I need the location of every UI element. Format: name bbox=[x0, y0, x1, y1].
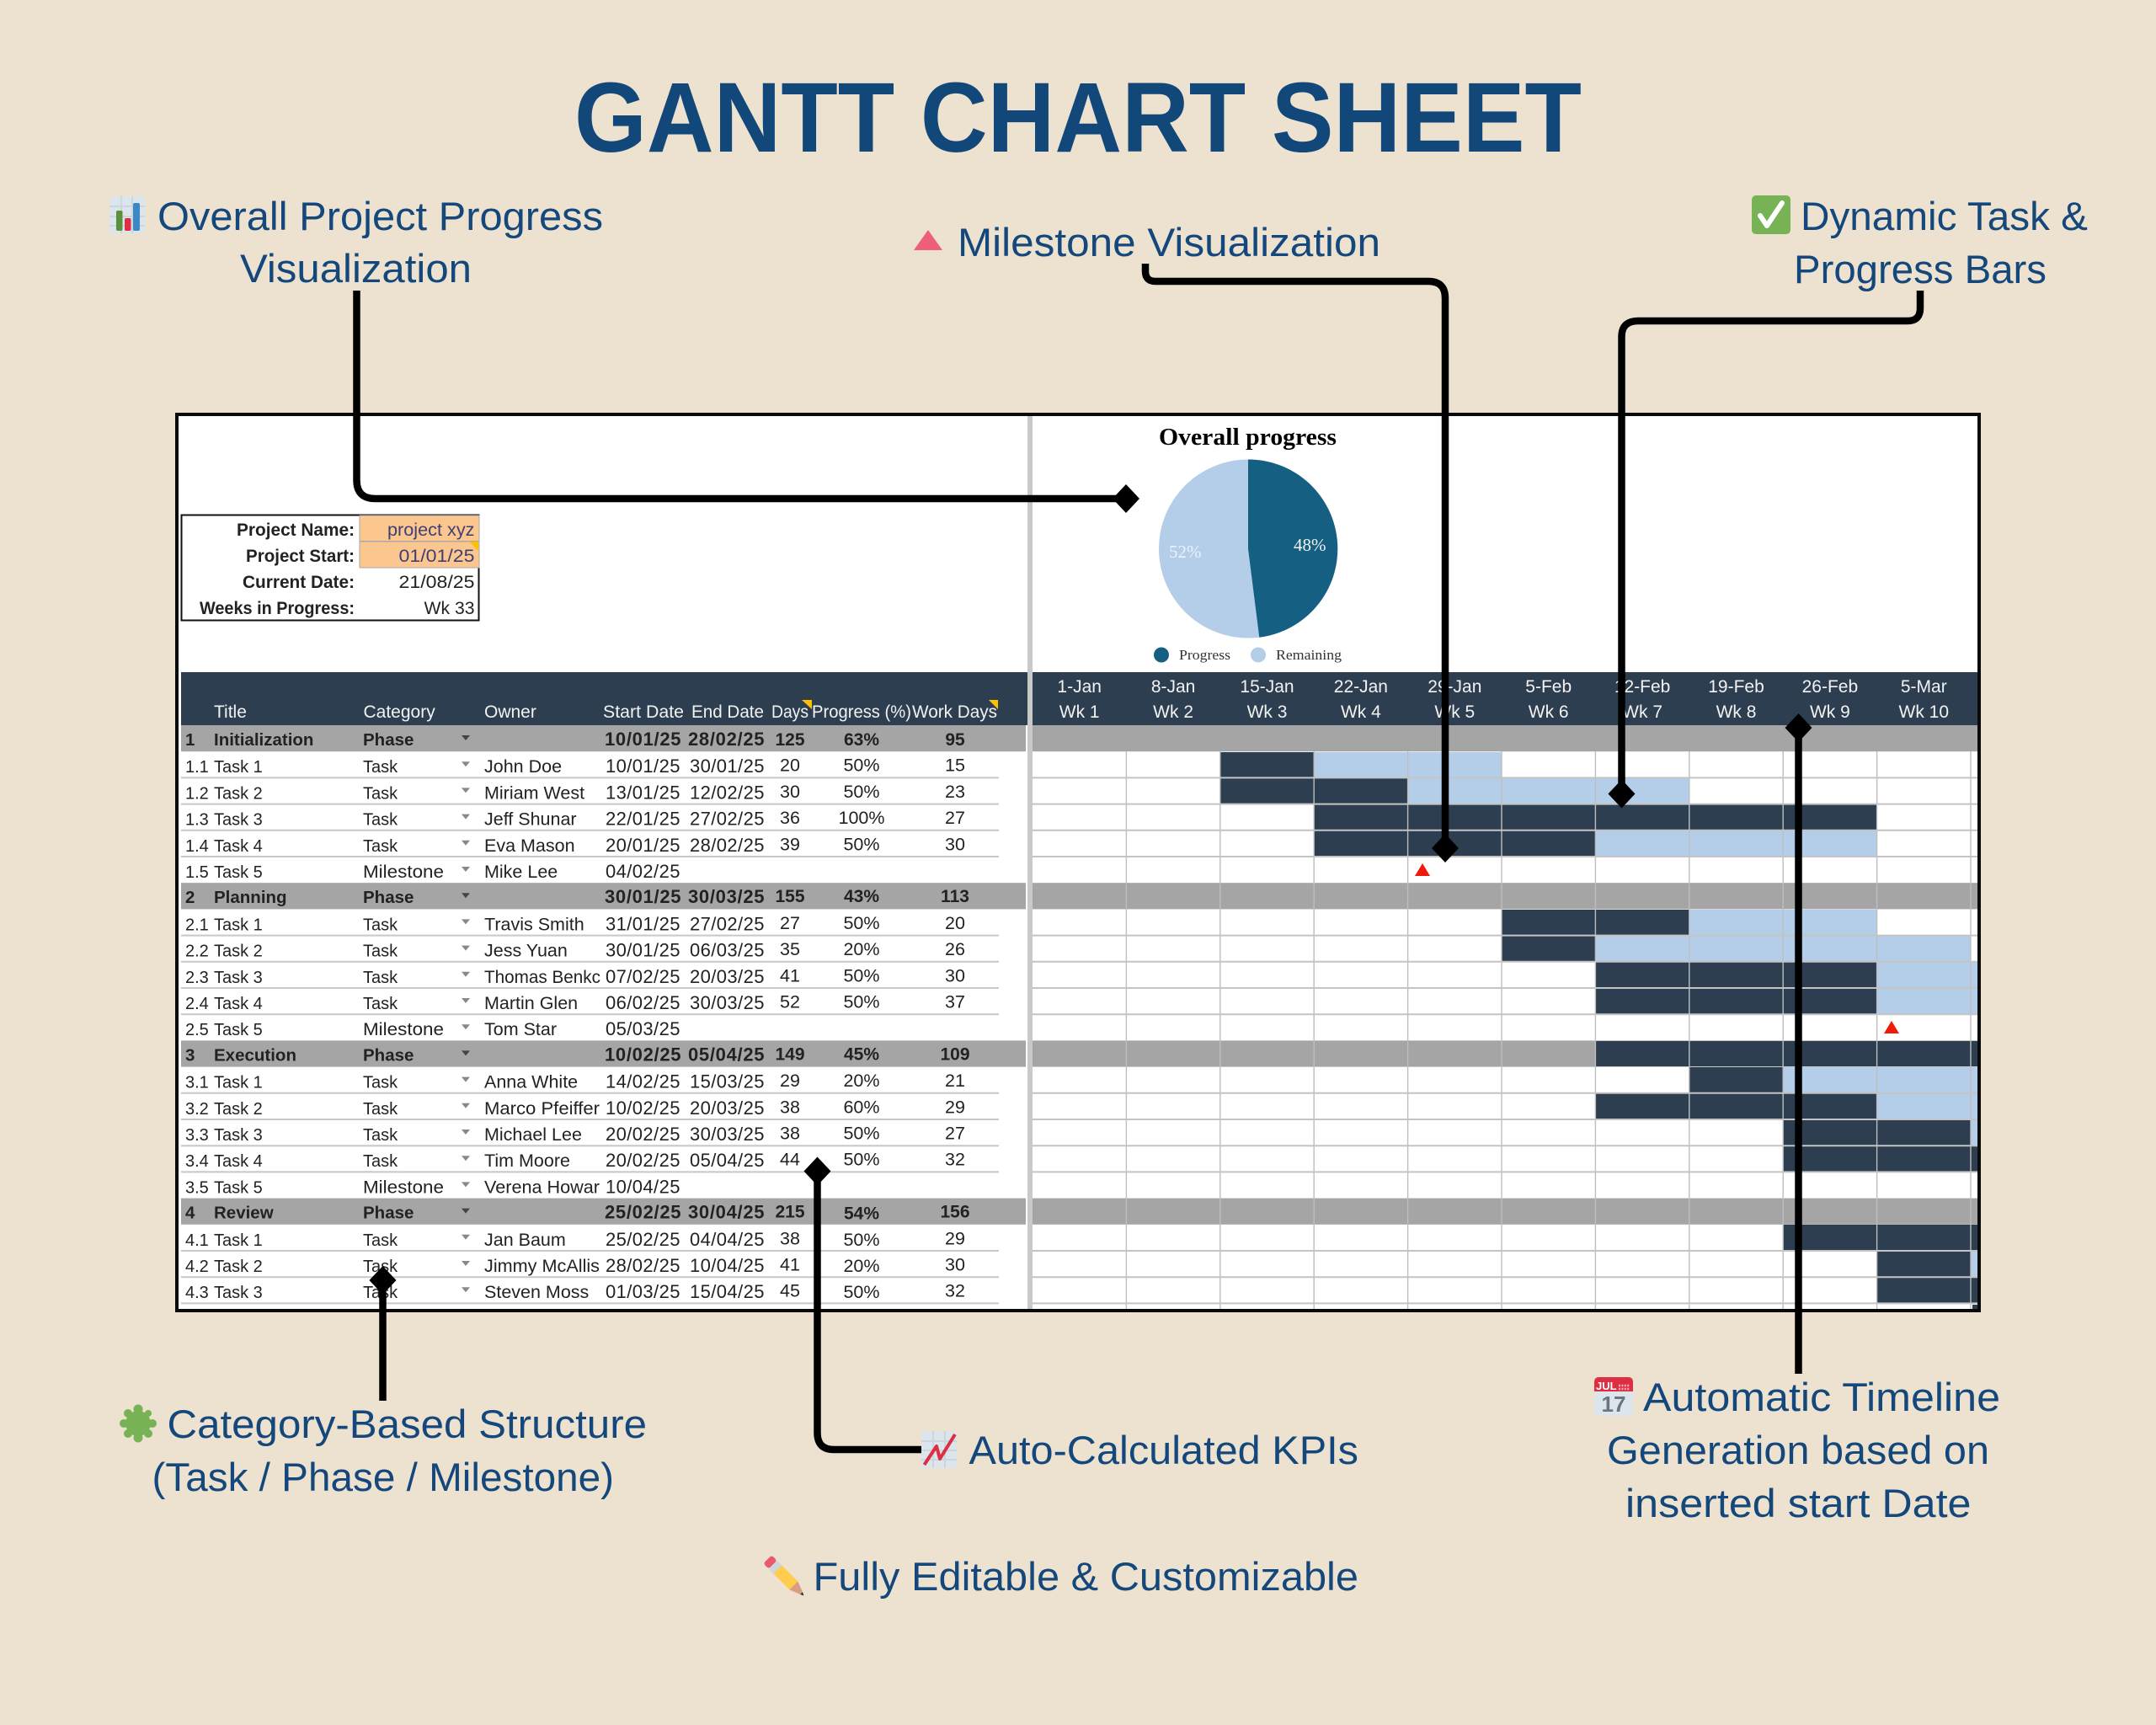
panel: gantt sheet bbox=[177, 414, 1979, 1311]
row 2.1: 27/02/25 bbox=[690, 913, 765, 934]
row 3.3: 3.3 bbox=[185, 1126, 209, 1145]
table header band: 26-Feb bbox=[1802, 677, 1858, 697]
row 4.2: 41 bbox=[780, 1255, 800, 1275]
phase row 2: Phase bbox=[363, 888, 414, 907]
table header band: Wk 2 bbox=[1153, 702, 1193, 722]
row 3.1: 21 bbox=[945, 1071, 965, 1091]
row 3.2: Task bbox=[363, 1100, 398, 1119]
phase row 3 bbox=[185, 1044, 970, 1065]
row 3.5: 10/04/25 bbox=[606, 1176, 680, 1197]
icon: milestone marker 1.5 bbox=[1415, 863, 1430, 876]
chart: overall progress pie: 48% bbox=[1294, 535, 1326, 555]
row 3.1: Task 1 bbox=[214, 1074, 263, 1092]
row 1.5: Task 5 bbox=[214, 863, 263, 882]
callout: category-based structure: (Task / Phase / Milestone) bbox=[152, 1455, 614, 1499]
row 2.1: 20 bbox=[945, 913, 965, 933]
row 3.3: Task bbox=[363, 1126, 398, 1145]
table header band: 12-Feb bbox=[1614, 677, 1670, 697]
row 3.3: 20/02/25 bbox=[606, 1124, 680, 1145]
row 4.3: Steven Moss bbox=[484, 1282, 589, 1302]
row 2.4: 50% bbox=[843, 992, 880, 1012]
row 2.3: 50% bbox=[843, 965, 880, 985]
row 3.3: 50% bbox=[843, 1124, 880, 1144]
phase row 2: 113 bbox=[941, 887, 969, 906]
row 2.2: 26 bbox=[945, 939, 965, 959]
row 2.1: 50% bbox=[843, 913, 880, 933]
row 4.2: Jimmy McAllis bbox=[484, 1256, 600, 1276]
row 1.4: 39 bbox=[780, 834, 800, 854]
row 2.1: Travis Smith bbox=[484, 914, 584, 934]
row 1.1: 10/01/25 bbox=[606, 756, 680, 777]
phase row 4: Review bbox=[214, 1204, 274, 1223]
row 2.4: 06/02/25 bbox=[606, 992, 680, 1013]
icon: calendar bbox=[1594, 1377, 1633, 1417]
row 2.5: Milestone bbox=[363, 1019, 444, 1039]
row 2.4: 2.4 bbox=[185, 995, 209, 1013]
row 2.3: Thomas Benkc bbox=[484, 967, 600, 987]
row 2.2: Task bbox=[363, 943, 398, 961]
row 1.4: 20/01/25 bbox=[606, 835, 680, 856]
phase row 2: Planning bbox=[214, 888, 287, 907]
phase row 1: 63% bbox=[844, 730, 879, 750]
row 3.1: 3.1 bbox=[185, 1074, 209, 1092]
row 3.2: 29 bbox=[945, 1097, 965, 1117]
table header band: Wk 4 bbox=[1341, 702, 1381, 722]
row 3.1: Anna White bbox=[484, 1072, 578, 1092]
row 1.1: Task bbox=[363, 758, 398, 777]
row 1.3 bbox=[181, 808, 999, 830]
row 2.3: Task bbox=[363, 969, 398, 987]
phase row 2: 30/01/25 bbox=[605, 886, 681, 907]
phase row 1: 10/01/25 bbox=[605, 729, 681, 750]
callout: milestone visualization: Milestone Visualization bbox=[958, 220, 1380, 264]
table rows bbox=[181, 729, 999, 1303]
phase row 4: 30/04/25 bbox=[688, 1202, 765, 1223]
panel: project info box: 01/01/25 bbox=[399, 547, 475, 566]
icon: green puzzle piece bbox=[120, 1405, 157, 1442]
row 2.4: Task 4 bbox=[214, 995, 263, 1013]
row 3.4: 20/02/25 bbox=[606, 1150, 680, 1171]
row 3.2: 20/03/25 bbox=[690, 1097, 765, 1119]
callout: overall project progress: Visualization bbox=[240, 246, 472, 291]
callout: overall project progress: Overall Project Progress bbox=[157, 194, 603, 238]
phase row 4 bbox=[185, 1202, 970, 1224]
row 4.1: 50% bbox=[843, 1230, 880, 1250]
row 4.3: Task 3 bbox=[214, 1284, 263, 1302]
row 3.3: Michael Lee bbox=[484, 1124, 582, 1145]
row 2.1: 31/01/25 bbox=[606, 913, 680, 934]
row 1.2: 12/02/25 bbox=[690, 782, 765, 803]
row 3.5: Verena Howar bbox=[484, 1177, 600, 1197]
row 4.1: 29 bbox=[945, 1228, 965, 1248]
row 4.1: 25/02/25 bbox=[606, 1229, 680, 1250]
row 2.5: 2.5 bbox=[185, 1021, 209, 1039]
row 3.4: 50% bbox=[843, 1150, 880, 1170]
phase row 3: Phase bbox=[363, 1045, 414, 1065]
row 4.2: 10/04/25 bbox=[690, 1255, 765, 1276]
callout: dynamic task and progress bars: Dynamic Task & bbox=[1801, 194, 2088, 238]
arrow: progress bars label to bars bbox=[1609, 291, 1920, 809]
table header band: 15-Jan bbox=[1240, 677, 1294, 697]
row 1.3: Task bbox=[363, 811, 398, 830]
row 3.1: 20% bbox=[843, 1071, 880, 1091]
table header band: 5-Mar bbox=[1901, 677, 1947, 697]
row 3.1: 29 bbox=[780, 1071, 800, 1091]
phase row 4: 156 bbox=[940, 1203, 970, 1222]
row 1.3: 27 bbox=[945, 808, 965, 828]
row 3.1: 15/03/25 bbox=[690, 1071, 765, 1092]
callout: automatic timeline generation: inserted start Date bbox=[1625, 1481, 1971, 1525]
title: GANTT CHART SHEET bbox=[574, 62, 1582, 174]
phase row 4: 25/02/25 bbox=[605, 1202, 681, 1223]
row 1.1 bbox=[181, 756, 999, 777]
row 3.3 bbox=[181, 1124, 999, 1146]
row 4.3: 15/04/25 bbox=[690, 1281, 765, 1302]
row 1.3: Task 3 bbox=[214, 811, 263, 830]
row 2.4: 52 bbox=[780, 992, 800, 1012]
row 2.4: Martin Glen bbox=[484, 993, 578, 1013]
row 2.2: 2.2 bbox=[185, 943, 209, 961]
row 4.1: 4.1 bbox=[185, 1231, 209, 1250]
callout: dynamic task and progress bars: Progress Bars bbox=[1794, 247, 2047, 291]
row 3.2 bbox=[181, 1097, 999, 1119]
phase row 3: 05/04/25 bbox=[688, 1044, 765, 1065]
callout: category-based structure bbox=[120, 1402, 647, 1499]
row 1.4: Task 4 bbox=[214, 837, 263, 856]
phase row 3: 10/02/25 bbox=[605, 1044, 681, 1065]
row 2.3: 41 bbox=[780, 965, 800, 985]
phase row 3: 45% bbox=[844, 1044, 879, 1064]
row 1.3: 27/02/25 bbox=[690, 809, 765, 830]
row 3.4: 44 bbox=[780, 1150, 800, 1170]
phase row 2 bbox=[185, 886, 969, 907]
row 3.3: 30/03/25 bbox=[690, 1124, 765, 1145]
table header band: Wk 3 bbox=[1247, 702, 1287, 722]
row 2.3: Task 3 bbox=[214, 969, 263, 987]
table header band: 22-Jan bbox=[1334, 677, 1388, 697]
row 4.2: 20% bbox=[843, 1256, 880, 1276]
row 3.1 bbox=[181, 1071, 999, 1093]
row 1.3: 1.3 bbox=[185, 811, 209, 830]
callout: automatic timeline generation bbox=[1594, 1375, 2000, 1525]
table header band: Wk 6 bbox=[1529, 702, 1569, 722]
callout: auto-calculated KPIs: Auto-Calculated KPIs bbox=[969, 1428, 1358, 1472]
icon: pencil bbox=[763, 1555, 808, 1599]
table header band: Owner bbox=[484, 702, 536, 722]
row 2.2: 35 bbox=[780, 939, 800, 959]
row 1.1: 1.1 bbox=[185, 758, 209, 777]
row 3.2: Task 2 bbox=[214, 1100, 263, 1119]
row 4.3: 4.3 bbox=[185, 1284, 209, 1302]
row 3.2: Marco Pfeiffer bbox=[484, 1098, 600, 1119]
row 2.2: Task 2 bbox=[214, 943, 263, 961]
row 1.5: Milestone bbox=[363, 862, 444, 882]
table header band: Wk 1 bbox=[1059, 702, 1100, 722]
row 1.1: 30/01/25 bbox=[690, 756, 765, 777]
row 2.3: 20/03/25 bbox=[690, 966, 765, 987]
callout: fully editable and customizable: Fully Editable & Customizable bbox=[814, 1554, 1358, 1599]
panel: project info box: Project Start: bbox=[246, 547, 355, 566]
row 2.3: 30 bbox=[945, 965, 965, 985]
row 2.5: 05/03/25 bbox=[606, 1018, 680, 1039]
row 3.4: 32 bbox=[945, 1150, 965, 1170]
row 2.1: Task 1 bbox=[214, 916, 263, 934]
row 1.2: 1.2 bbox=[185, 784, 209, 803]
row 1.2: Miriam West bbox=[484, 782, 584, 803]
row 1.2: Task 2 bbox=[214, 784, 263, 803]
row 4.1: Jan Baum bbox=[484, 1230, 566, 1250]
icon: milestone marker 2.5 bbox=[1884, 1021, 1899, 1033]
row 3.4: Tim Moore bbox=[484, 1151, 570, 1171]
row 4.3: Task bbox=[363, 1284, 398, 1302]
panel: project info box: project xyz bbox=[387, 521, 475, 540]
row 2.5: Task 5 bbox=[214, 1021, 263, 1039]
table header band bbox=[181, 672, 1977, 725]
row 1.2: 50% bbox=[843, 782, 880, 802]
table header band: End Date bbox=[691, 702, 764, 722]
arrow: overall progress to pie chart bbox=[357, 291, 1139, 513]
row 3.4: 3.4 bbox=[185, 1152, 209, 1171]
callout: automatic timeline generation: Automatic Timeline bbox=[1643, 1375, 2000, 1419]
phase row 3: 3 bbox=[185, 1045, 195, 1065]
row 2.1: 2.1 bbox=[185, 916, 209, 934]
panel: project info box: Current Date: bbox=[243, 573, 355, 592]
icon: line chart bbox=[921, 1431, 957, 1468]
table header band: Wk 7 bbox=[1622, 702, 1662, 722]
row 4.3: 45 bbox=[780, 1281, 800, 1301]
row 2.3 bbox=[181, 965, 999, 988]
phase row 1 bbox=[185, 729, 965, 750]
row 1.4: 50% bbox=[843, 834, 880, 854]
panel: project info box: Weeks in Progress: bbox=[200, 599, 355, 618]
table header band: Wk 10 bbox=[1899, 702, 1949, 722]
gantt timeline grid and bars bbox=[181, 725, 1977, 1310]
row 3.3: 38 bbox=[780, 1124, 800, 1144]
arrow: timeline label to week header bbox=[1785, 713, 1812, 1374]
row 4.2 bbox=[181, 1255, 999, 1277]
row 1.4: 1.4 bbox=[185, 837, 209, 856]
row 3.2: 38 bbox=[780, 1097, 800, 1117]
table header band: 5-Feb bbox=[1525, 677, 1572, 697]
callout: category-based structure: Category-Based Structure bbox=[167, 1402, 647, 1446]
row 3.4: 05/04/25 bbox=[690, 1150, 765, 1171]
row 1.2: 30 bbox=[780, 782, 800, 802]
phase row 1: Phase bbox=[363, 730, 414, 750]
phase row 2: 155 bbox=[775, 887, 805, 906]
row 1.2: Task bbox=[363, 784, 398, 803]
table header band: 8-Jan bbox=[1151, 677, 1195, 697]
table header band: 19-Feb bbox=[1708, 677, 1764, 697]
row 2.1: Task bbox=[363, 916, 398, 934]
row 2.2: 20% bbox=[843, 939, 880, 959]
phase row 1: 28/02/25 bbox=[688, 729, 765, 750]
row 4.2: Task bbox=[363, 1258, 398, 1276]
phase row 3: Execution bbox=[214, 1045, 296, 1065]
row 2.1 bbox=[181, 913, 999, 936]
row 1.1: Task 1 bbox=[214, 758, 263, 777]
table header band: Wk 5 bbox=[1434, 702, 1475, 722]
row 1.2: 23 bbox=[945, 782, 965, 802]
row 3.2: 10/02/25 bbox=[606, 1097, 680, 1119]
row 4.1 bbox=[181, 1228, 999, 1251]
row 3.4: Task 4 bbox=[214, 1152, 263, 1171]
table header band: Wk 8 bbox=[1716, 702, 1756, 722]
table header band: Days bbox=[771, 702, 808, 722]
panel: project info box bbox=[182, 515, 479, 620]
row 2.3: 2.3 bbox=[185, 969, 209, 987]
phase row 2: 43% bbox=[844, 887, 879, 906]
table header band: Work Days bbox=[912, 702, 997, 722]
row 1.4: Task bbox=[363, 837, 398, 856]
row 2.5 bbox=[185, 1018, 680, 1039]
phase row 4: Phase bbox=[363, 1204, 414, 1223]
row 1.3: 100% bbox=[839, 808, 884, 828]
chart: overall progress pie bbox=[1154, 424, 1342, 663]
row 4.1: Task bbox=[363, 1231, 398, 1250]
row 2.1: 27 bbox=[780, 913, 800, 933]
phase row 4: 4 bbox=[185, 1204, 195, 1223]
row 2.2: Jess Yuan bbox=[484, 941, 568, 961]
arrow: KPI label to days column bbox=[803, 1157, 921, 1450]
row 2.5: Tom Star bbox=[484, 1019, 557, 1039]
row 4.3 bbox=[181, 1281, 999, 1303]
row 2.2 bbox=[181, 939, 999, 962]
row 3.5: Milestone bbox=[363, 1177, 444, 1197]
row 4.2: 30 bbox=[945, 1255, 965, 1275]
row 3.1: Task bbox=[363, 1074, 398, 1092]
row 3.5: 3.5 bbox=[185, 1178, 209, 1197]
row 4.1: 04/04/25 bbox=[690, 1229, 765, 1250]
arrow: category label to category column bbox=[369, 1266, 396, 1401]
row 1.5: 04/02/25 bbox=[606, 861, 680, 882]
row 3.5 bbox=[185, 1176, 680, 1197]
row 3.3: 27 bbox=[945, 1124, 965, 1144]
row 1.4 bbox=[181, 834, 999, 857]
callout: dynamic task and progress bars bbox=[1752, 194, 2088, 291]
phase row 1: 125 bbox=[775, 730, 805, 750]
table header band: Category bbox=[364, 702, 435, 722]
row 1.1: 15 bbox=[945, 756, 965, 776]
row 1.3: Jeff Shunar bbox=[484, 809, 577, 830]
row 1.4: 30 bbox=[945, 834, 965, 854]
row 3.2: 3.2 bbox=[185, 1100, 209, 1119]
row 1.4: 28/02/25 bbox=[690, 835, 765, 856]
row 1.2: 13/01/25 bbox=[606, 782, 680, 803]
row 4.3: 32 bbox=[945, 1281, 965, 1301]
row 3.4 bbox=[181, 1150, 999, 1172]
row 2.4 bbox=[181, 992, 999, 1014]
phase row 2: 30/03/25 bbox=[688, 886, 765, 907]
row 1.3: 36 bbox=[780, 808, 800, 828]
row 3.1: 14/02/25 bbox=[606, 1071, 680, 1092]
row 4.3: 50% bbox=[843, 1282, 880, 1302]
row 1.1: John Doe bbox=[484, 756, 562, 777]
icon: bar chart bbox=[109, 196, 145, 233]
row 1.2 bbox=[181, 782, 999, 804]
panel: project info box: Wk 33 bbox=[424, 599, 475, 618]
row 2.4: 30/03/25 bbox=[690, 992, 765, 1013]
table header band: 29-Jan bbox=[1428, 677, 1481, 697]
row 4.2: Task 2 bbox=[214, 1258, 263, 1276]
row 1.5 bbox=[185, 861, 680, 882]
row 2.4: Task bbox=[363, 995, 398, 1013]
callout: automatic timeline generation: Generation based on bbox=[1607, 1428, 1989, 1472]
phase row 4: 54% bbox=[844, 1204, 879, 1224]
phase row 3: 149 bbox=[775, 1044, 805, 1064]
panel: project info box: 21/08/25 bbox=[399, 573, 475, 592]
panel: project info box: Project Name: bbox=[237, 521, 355, 540]
row 1.1: 20 bbox=[780, 756, 800, 776]
row 3.3: Task 3 bbox=[214, 1126, 263, 1145]
row 4.1: 38 bbox=[780, 1228, 800, 1248]
table header band: Title bbox=[214, 702, 247, 722]
row 3.4: Task bbox=[363, 1152, 398, 1171]
icon: green check bbox=[1752, 195, 1790, 234]
row 1.4: Eva Mason bbox=[484, 836, 575, 856]
table header band: Start Date bbox=[603, 702, 684, 722]
phase row 3: 109 bbox=[940, 1044, 970, 1064]
row 1.3: 22/01/25 bbox=[606, 809, 680, 830]
phase row 1: 1 bbox=[185, 730, 195, 750]
chart: overall progress pie: Progress bbox=[1179, 647, 1230, 663]
row 2.2: 30/01/25 bbox=[606, 940, 680, 961]
icon: calendar: JUL bbox=[1596, 1380, 1617, 1392]
row 3.5: Task 5 bbox=[214, 1178, 263, 1197]
icon: pink triangle bbox=[914, 230, 942, 250]
table header band: Wk 9 bbox=[1810, 702, 1850, 722]
row 3.2: 60% bbox=[843, 1097, 880, 1117]
row 2.2: 06/03/25 bbox=[690, 940, 765, 961]
arrow: milestone label to milestone marker bbox=[1145, 264, 1459, 862]
chart: overall progress pie: 52% bbox=[1169, 542, 1201, 562]
phase row 4: 215 bbox=[775, 1203, 805, 1222]
icon: calendar: 17 bbox=[1602, 1391, 1625, 1417]
row 2.3: 07/02/25 bbox=[606, 966, 680, 987]
row 1.5: 1.5 bbox=[185, 863, 209, 882]
row 4.3: 01/03/25 bbox=[606, 1281, 680, 1302]
chart: overall progress pie: Overall progress bbox=[1159, 424, 1337, 451]
callout: overall project progress bbox=[109, 194, 603, 291]
chart: overall progress pie: Remaining bbox=[1276, 647, 1342, 663]
table header band: 1-Jan bbox=[1057, 677, 1102, 697]
phase row 2: 2 bbox=[185, 888, 195, 907]
row 2.4: 37 bbox=[945, 992, 965, 1012]
row 4.2: 4.2 bbox=[185, 1258, 209, 1276]
row 1.1: 50% bbox=[843, 756, 880, 776]
row 4.1: Task 1 bbox=[214, 1231, 263, 1250]
row 1.5: Mike Lee bbox=[484, 862, 558, 882]
row 4.2: 28/02/25 bbox=[606, 1255, 680, 1276]
table header band: Progress (%) bbox=[812, 702, 911, 722]
phase row 1: 95 bbox=[945, 730, 965, 750]
phase row 1: Initialization bbox=[214, 730, 313, 750]
